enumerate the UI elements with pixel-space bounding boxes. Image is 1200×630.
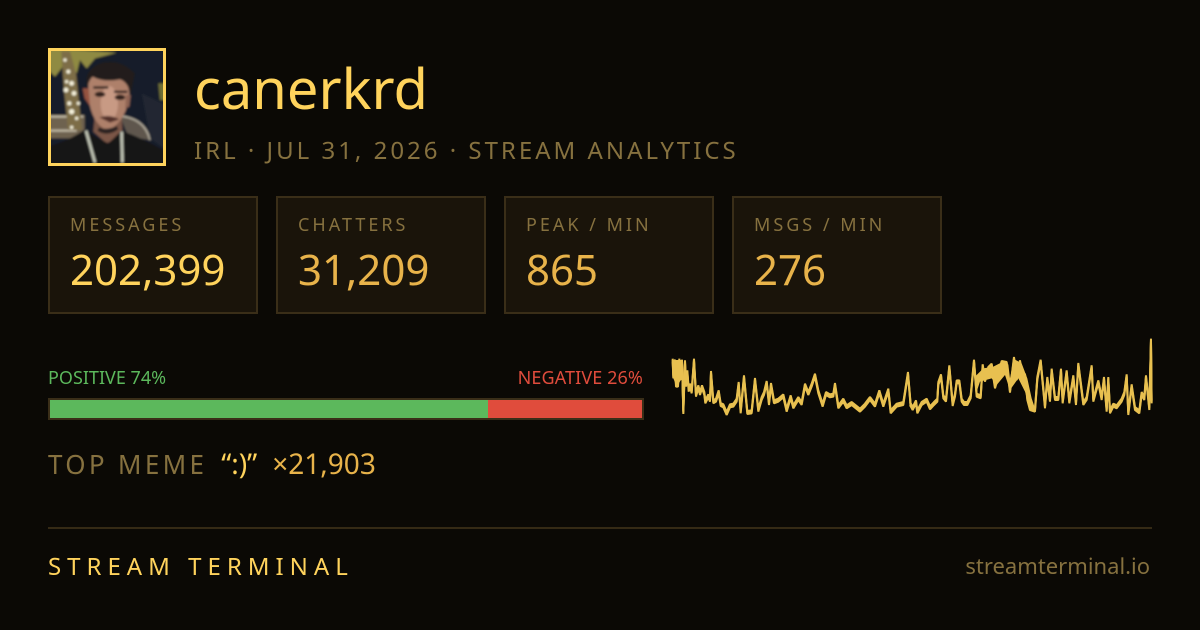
footer url: streamterminal.io [965,551,1150,581]
stat card: chatters [276,196,486,314]
stat card: chatters: 31,209 [298,241,429,298]
stat card: messages per minute [732,196,942,314]
stat card: messages per minute: 276 [754,241,826,298]
stat card: messages: MESSAGES [70,213,184,237]
stat card: peak per minute: 865 [526,241,598,298]
stat card: chatters: CHATTERS [298,213,408,237]
sentiment bar [48,398,644,420]
avatar photo [48,48,166,166]
stat card: messages [48,196,258,314]
footer brand: STREAM TERMINAL [48,550,354,583]
stat card: peak per minute [504,196,714,314]
positive label: POSITIVE 74% [48,366,166,390]
title: canerkrd [194,50,428,126]
stat card: messages: 202,399 [70,241,225,298]
top meme line: TOP MEME “:)” ×21,903 [48,445,376,483]
negative label: NEGATIVE 26% [518,366,643,390]
stat card: peak per minute: PEAK / MIN [526,213,652,237]
stat card: messages per minute: MSGS / MIN [754,213,885,237]
subtitle: IRL · JUL 31, 2026 · STREAM ANALYTICS [194,134,739,167]
